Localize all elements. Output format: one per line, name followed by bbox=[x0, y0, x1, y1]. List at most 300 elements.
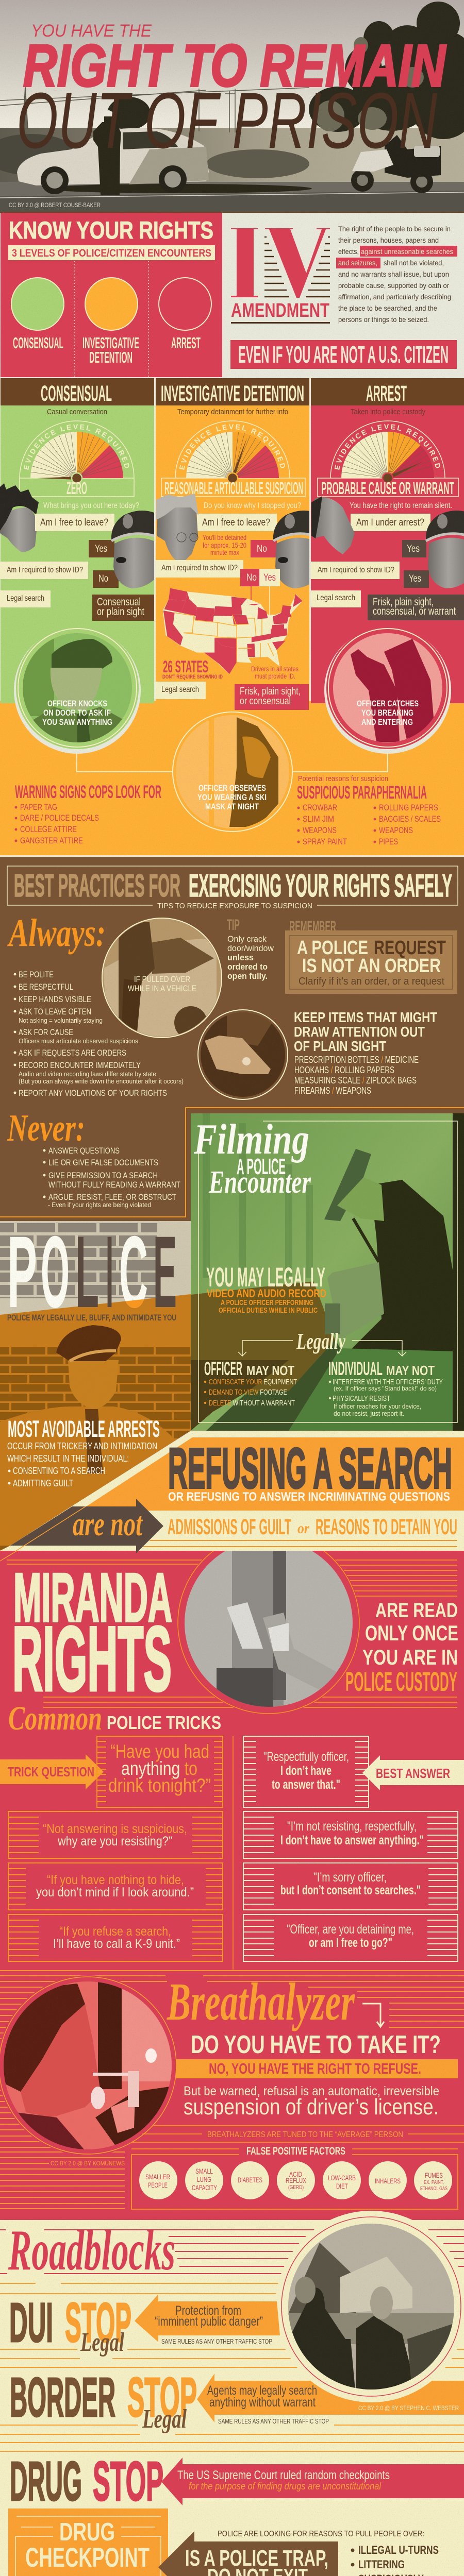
trick: K-9 unit bbox=[8, 1914, 223, 1961]
answer: yes bbox=[402, 540, 426, 557]
level: consensual bbox=[11, 278, 64, 352]
trick: K-9 unit: “If you refuse a search, bbox=[59, 1924, 171, 1939]
heading: best practices: BEST PRACTICES FOR bbox=[14, 868, 180, 904]
list: suspicious paraphernalia: WEAPONS bbox=[379, 825, 413, 835]
panel: refusing a search bbox=[0, 1431, 464, 1561]
list: always: Not asking = voluntarily staying bbox=[19, 1016, 103, 1024]
bubble: legal search bbox=[155, 682, 206, 699]
bubble: legal search: Legal search bbox=[317, 594, 355, 602]
description: Temporary detainment for further info bbox=[177, 408, 288, 416]
list: always: (But you can always write down the encounter after it occurs) bbox=[19, 1077, 184, 1085]
heading: common police tricks bbox=[8, 1700, 221, 1737]
answer: yes bbox=[89, 540, 114, 557]
are read only once bbox=[345, 1599, 458, 1697]
title bbox=[16, 21, 446, 165]
panel: never bbox=[0, 1107, 464, 1217]
face: citizen bbox=[0, 483, 39, 552]
drug stop: DRUG bbox=[10, 2450, 82, 2512]
list: reasons to pull people over: POLICE ARE LOOKING FOR REASONS TO PULL PEOPLE OVER: bbox=[218, 2530, 424, 2538]
answer: frisk: Frisk, plain sight, bbox=[240, 686, 301, 697]
arrow: are not bbox=[0, 1499, 163, 1561]
text: WARNING SIGNS COPS LOOK FOR bbox=[15, 782, 161, 802]
heading: roadblocks: Roadblocks bbox=[8, 2218, 175, 2282]
DUI stop: DUI bbox=[9, 2291, 53, 2353]
arrow: trick question: TRICK QUESTION bbox=[8, 1764, 94, 1780]
border stop: BORDER bbox=[10, 2366, 115, 2428]
detention note: You'll be detained bbox=[203, 533, 246, 541]
note: breathalyzers tuned to average: BREATHALYZERS ARE TUNED TO THE “AVERAGE” PERSON bbox=[207, 2130, 403, 2139]
list: always: ASK IF REQUESTS ARE ORDERS bbox=[19, 1048, 126, 1058]
fourth amendment text: persons or things to be seized. bbox=[338, 315, 429, 324]
level: investigative detention bbox=[82, 278, 139, 366]
tip: door/window bbox=[227, 943, 274, 953]
prompt: What brings you out here today? bbox=[43, 501, 139, 510]
note: drivers: Drivers in all states bbox=[251, 665, 299, 673]
evidence gauge: reasonable suspicion: EVIDENCE LEVEL REQUIRED bbox=[179, 424, 285, 470]
POLICE word: C bbox=[119, 1215, 148, 1329]
fourth amendment text: effects, bbox=[338, 247, 359, 256]
connector lines bbox=[77, 754, 388, 772]
panel: police may legally lie bbox=[0, 1215, 191, 1556]
answer: yes: Yes bbox=[409, 573, 421, 584]
panel: false positive factors: FALSE POSITIVE FACTORS bbox=[246, 2145, 345, 2157]
tip: open fully. bbox=[227, 971, 268, 981]
factor: acid reflux: REFLUX bbox=[286, 2176, 306, 2184]
orange backdrop of encounters area bbox=[0, 701, 464, 855]
answer: am I free to go bbox=[243, 1914, 458, 1961]
answer: am I free to go: "Officer, are you detaining me, bbox=[287, 1922, 414, 1937]
arrow: are not: are not bbox=[73, 1505, 143, 1543]
heading: miranda rights: MIRANDA bbox=[13, 1560, 172, 1636]
question and answer bbox=[176, 2031, 458, 2120]
panel: know your rights bbox=[1, 213, 222, 377]
factor: acid reflux: ACID bbox=[289, 2170, 302, 2178]
fourth amendment text: their persons, houses, papers and bbox=[338, 236, 439, 244]
list: always: ASK TO LEAVE OFTEN bbox=[19, 1007, 91, 1016]
note: breathalyzers tuned to average bbox=[131, 2126, 464, 2142]
factor: inhalers: INHALERS bbox=[375, 2177, 401, 2185]
answer: yes: Yes bbox=[95, 544, 107, 554]
scenario circle: officer catches: AND ENTERING bbox=[361, 717, 413, 727]
roadblock rule lines bbox=[0, 2230, 464, 2274]
trick: have you had anything: drink tonight?” bbox=[108, 1775, 211, 1796]
evidence gauge: zero bbox=[19, 420, 135, 498]
trick: nothing to hide bbox=[8, 1863, 223, 1910]
factor: diabetes bbox=[231, 2161, 269, 2199]
face: balding citizen bbox=[311, 496, 355, 554]
answer: no: No bbox=[98, 573, 108, 584]
stat: 26 states: DON'T REQUIRE SHOWING ID bbox=[162, 674, 223, 680]
list: keep items out of plain sight: MEASURING SCALE / ZIPLOCK BAGS bbox=[294, 1075, 417, 1086]
answer: am I free to go: or am I free to go?" bbox=[309, 1936, 392, 1950]
list: suspicious paraphernalia: SLIM JIM bbox=[303, 814, 334, 824]
face: police officer bbox=[111, 511, 154, 588]
scenario circle: officer observes: MASK AT NIGHT bbox=[205, 802, 259, 811]
IV amendment emblem: AMENDMENT bbox=[231, 300, 329, 321]
factor: fumes: EX. PAINT, bbox=[424, 2180, 444, 2185]
list: suspicious paraphernalia: CROWBAR bbox=[303, 803, 337, 812]
stat: 26 states: 26 STATES bbox=[163, 657, 208, 676]
evidence gauge: probable cause bbox=[317, 420, 459, 498]
list: officer may not: DEMAND TO VIEW FOOTAGE bbox=[209, 1388, 287, 1397]
face: older citizen bbox=[156, 494, 198, 564]
heading: A POLICE bbox=[237, 1154, 286, 1179]
list: suspicious paraphernalia: PIPES bbox=[379, 837, 398, 846]
answer: frisk bbox=[235, 684, 309, 710]
panel: miranda rights and tricks background bbox=[0, 1551, 464, 2220]
list: suspicious paraphernalia: SPRAY PAINT bbox=[303, 837, 347, 846]
scenario circle: officer catches: OFFICER CATCHES bbox=[357, 699, 419, 708]
answer: yes bbox=[404, 570, 429, 588]
road sign: drug checkpoint bbox=[8, 2509, 168, 2576]
bubble: am I under arrest: Am I under arrest? bbox=[356, 517, 424, 528]
trick: not answering is suspicious: why are you resisting?” bbox=[57, 1834, 172, 1849]
answer: no or yes by state bbox=[240, 569, 280, 586]
list: officer may not: OFFICER bbox=[204, 1358, 242, 1379]
answer: frisk or warrant: Frisk, plain sight, bbox=[373, 596, 434, 608]
list: keep items out of plain sight: HOOKAHS / ROLLING PAPERS bbox=[294, 1065, 394, 1075]
factor: fumes: ETHANOL GAS bbox=[420, 2186, 448, 2192]
heading: common police tricks: POLICE TRICKS bbox=[107, 1712, 221, 1733]
answer: frisk: or consensual bbox=[240, 696, 291, 707]
DUI stop: Legal bbox=[80, 2328, 124, 2357]
bubble: legal search: Legal search bbox=[7, 594, 44, 603]
border stop: anything without warrant bbox=[209, 2395, 316, 2410]
panel: know your rights: INVESTIGATIVE bbox=[82, 334, 139, 352]
IV amendment emblem bbox=[231, 228, 330, 324]
POLICE word: O bbox=[41, 1215, 70, 1329]
list: suspicious paraphernalia: WEAPONS bbox=[303, 825, 337, 835]
answer: respectfully officer bbox=[243, 1736, 369, 1807]
border stop: STOP bbox=[127, 2366, 197, 2428]
list: reasons to pull people over: LITTERING bbox=[358, 2558, 405, 2571]
tip: unless bbox=[227, 953, 254, 962]
scenario circle: officer catches bbox=[324, 626, 451, 754]
scenario circle: officer observes: YOU WEARING A SKI bbox=[197, 792, 267, 802]
fourth amendment text: against unreasonable searches bbox=[361, 247, 453, 256]
detention note bbox=[203, 533, 246, 556]
heading: KNOW YOUR RIGHTS bbox=[9, 216, 213, 244]
scenario circle: officer knocks bbox=[14, 626, 141, 754]
note: drivers bbox=[251, 665, 299, 680]
hero photo: officer at traffic stop bbox=[0, 0, 464, 212]
border stop: Agents may legally search bbox=[207, 2383, 317, 2398]
panel: police may legally lie: E bbox=[153, 1215, 177, 1329]
trick: have you had anything bbox=[97, 1736, 223, 1807]
bubble: legal search bbox=[311, 590, 361, 607]
bubble: am I free to leave bbox=[197, 514, 277, 531]
photo credit: CC BY 2.0 @ ROBERT COUSE-BAKER bbox=[9, 201, 101, 209]
tip: ordered to bbox=[227, 962, 268, 972]
factor: acid reflux: (GERD) bbox=[288, 2184, 304, 2191]
most avoidable arrests bbox=[7, 1416, 160, 1488]
factor: fumes bbox=[414, 2161, 452, 2199]
trick: K-9 unit: I’ll have to call a K-9 unit.” bbox=[53, 1937, 180, 1951]
factor: low-carb diet: LOW-CARB bbox=[328, 2174, 356, 2182]
list: suspicious paraphernalia: BAGGIES / SCALES bbox=[379, 814, 441, 824]
scenario circle: officer observes bbox=[173, 712, 292, 832]
most avoidable arrests: ADMITTING GUILT bbox=[13, 1478, 73, 1488]
note: drivers: must provide ID. bbox=[255, 672, 295, 680]
heading: best practices bbox=[7, 866, 458, 910]
fourth amendment text: probable cause, supported by oath or bbox=[338, 281, 449, 290]
description: Casual conversation bbox=[47, 408, 107, 416]
bubble: am I free to leave: Am I free to leave? bbox=[40, 517, 108, 528]
level: arrest bbox=[159, 278, 211, 352]
list: suspicious paraphernalia: Potential reasons for suspicion bbox=[298, 774, 388, 783]
factor: smaller people: PEOPLE bbox=[148, 2181, 168, 2189]
fourth amendment text bbox=[336, 225, 457, 324]
cuffs photo circle bbox=[177, 1531, 360, 1715]
answer: respectfully officer: to answer that." bbox=[272, 1777, 340, 1792]
photo circle: hand with pills bbox=[198, 1010, 288, 1099]
panel: roadblocks background bbox=[0, 2220, 464, 2576]
list: always: REPORT ANY VIOLATIONS OF YOUR RIGHTS bbox=[19, 1088, 167, 1098]
column: consensual: CONSENSUAL bbox=[41, 381, 112, 406]
border stop bbox=[10, 2366, 459, 2434]
list: warning signs cops look for: COLLEGE ATTIRE bbox=[20, 824, 77, 834]
drug stop: for the purpose of finding drugs are unconstitutional bbox=[189, 2481, 382, 2492]
answer: consensual or plain sight bbox=[92, 595, 154, 621]
DUI stop: SAME RULES AS ANY OTHER TRAFFIC STOP bbox=[161, 2337, 272, 2345]
trick: nothing to hide: “If you have nothing to hide, bbox=[47, 1873, 184, 1887]
scenario circle: officer knocks: YOU SAW ANYTHING bbox=[42, 717, 112, 727]
photo circle: pulled over: IF PULLED OVER bbox=[134, 974, 190, 984]
answer: not resisting bbox=[243, 1811, 458, 1858]
callout: a police request is not an order bbox=[285, 918, 457, 994]
scenario circle: officer knocks: ON DOOR TO ASK IF bbox=[43, 708, 111, 718]
column: arrest bbox=[311, 378, 464, 703]
panel: never: ANSWER QUESTIONS bbox=[48, 1146, 120, 1156]
list: always: KEEP HANDS VISIBLE bbox=[19, 994, 91, 1004]
factor: small lung capacity bbox=[185, 2161, 223, 2199]
answer: don't consent bbox=[243, 1863, 458, 1910]
border stop: Legal bbox=[142, 2404, 187, 2434]
list: warning signs cops look for: GANGSTER ATTIRE bbox=[20, 836, 83, 845]
list: always bbox=[7, 911, 184, 1098]
bubble: required to show ID: Am I required to show ID? bbox=[161, 564, 238, 572]
photo circle: pulled over: WHILE IN A VEHICLE bbox=[128, 984, 196, 993]
heading: breathalyzer: Breathalyzer bbox=[167, 1972, 355, 2031]
trick: not answering is suspicious: “Not answering is suspicious, bbox=[43, 1822, 187, 1836]
panel: never: LIE OR GIVE FALSE DOCUMENTS bbox=[48, 1158, 158, 1167]
DUI stop: Protection from bbox=[175, 2303, 241, 2318]
US stop-and-identify map bbox=[163, 588, 303, 674]
panel: never: WITHOUT FULLY READING A WARRANT bbox=[48, 1180, 180, 1190]
list: always: RECORD ENCOUNTER IMMEDIATELY bbox=[19, 1060, 141, 1070]
arrow: down bbox=[362, 2004, 384, 2027]
most avoidable arrests: CONSENTING TO A SEARCH bbox=[13, 1466, 105, 1476]
title: YOU HAVE THE bbox=[31, 21, 152, 41]
trick: nothing to hide: you don’t mind if I look around.” bbox=[36, 1885, 194, 1900]
bubble: required to show ID: Am I required to show ID? bbox=[7, 566, 83, 574]
column: investigative detention: INVESTIGATIVE DETENTION bbox=[161, 381, 304, 406]
orange officer photo bbox=[0, 1288, 191, 1556]
you may legally: A POLICE OFFICER PERFORMING bbox=[221, 1298, 313, 1307]
factor: fumes: FUMES bbox=[425, 2171, 443, 2179]
list: reasons to pull people over bbox=[218, 2530, 439, 2576]
road sign: drug checkpoint: DRUG bbox=[59, 2518, 115, 2546]
you may legally: OFFICIAL DUTIES WHILE IN PUBLIC bbox=[219, 1306, 318, 1315]
list: individual may not: PHYSICALLY RESIST bbox=[333, 1394, 390, 1403]
heading: miranda rights bbox=[0, 1531, 458, 1715]
arrow tail redrawn over red bbox=[136, 1551, 139, 1553]
face: police officer bbox=[272, 511, 309, 588]
trick: have you had anything: “Have you had bbox=[110, 1741, 209, 1762]
list: keep items out of plain sight: FIREARMS / WEAPONS bbox=[294, 1086, 371, 1096]
fourth amendment text: the place to be searched, and the bbox=[338, 304, 437, 312]
column: investigative detention bbox=[155, 378, 309, 710]
list: individual may not: do not resist, just report it. bbox=[334, 1410, 404, 1417]
heading: common police tricks: Common bbox=[8, 1700, 102, 1737]
list: keep items out of plain sight: DRAW ATTENTION OUT bbox=[294, 1024, 425, 1040]
stat: 26 states bbox=[162, 657, 223, 680]
evidence gauge: reasonable suspicion bbox=[161, 420, 306, 498]
list: always: Always: bbox=[7, 911, 106, 955]
DUI stop: “imminent public danger” bbox=[155, 2314, 263, 2329]
factor: smaller people: SMALLER bbox=[145, 2173, 170, 2181]
bubble: required to show ID bbox=[311, 562, 400, 579]
list: keep items out of plain sight: OF PLAIN SIGHT bbox=[294, 1038, 386, 1054]
list: officer may not bbox=[204, 1358, 297, 1408]
list: keep items out of plain sight: PRESCRIPTION BOTTLES / MEDICINE bbox=[294, 1055, 419, 1065]
detention note: for approx. 15-20 bbox=[203, 541, 246, 549]
factor: low-carb diet bbox=[323, 2161, 361, 2199]
bubble: legal search bbox=[0, 590, 51, 607]
heading: Filming bbox=[193, 1115, 309, 1163]
panel: know your rights: CONSENSUAL bbox=[13, 334, 63, 352]
trick: have you had anything: anything to bbox=[121, 1758, 197, 1779]
answer: not resisting: "I’m not resisting, respectfully, bbox=[287, 1819, 417, 1834]
DUI stop bbox=[9, 2291, 280, 2357]
photo circle: breathalyzer test bbox=[0, 1975, 178, 2156]
fourth amendment text: affirmation, and particularly describing bbox=[338, 293, 451, 301]
list: suspicious paraphernalia: ROLLING PAPERS bbox=[379, 803, 438, 812]
scenario circle: officer knocks: OFFICER KNOCKS bbox=[47, 699, 107, 708]
you may legally bbox=[206, 1262, 326, 1315]
bubble: required to show ID bbox=[0, 562, 88, 579]
prompt: Do you know why I stopped you? bbox=[204, 501, 301, 510]
bubble: am I under arrest bbox=[351, 514, 430, 531]
answer: frisk or warrant bbox=[368, 595, 464, 620]
factor: small lung capacity: CAPACITY bbox=[192, 2183, 217, 2192]
list: warning signs cops look for bbox=[14, 782, 161, 845]
factor: diabetes: DIABETES bbox=[238, 2176, 262, 2184]
list: warning signs cops look for: DARE / POLICE DECALS bbox=[20, 813, 99, 823]
drug stop: The US Supreme Court ruled random checkpoints bbox=[177, 2468, 390, 2482]
callout: police trap bbox=[158, 2531, 338, 2576]
bubble: required to show ID bbox=[155, 560, 243, 578]
drug stop: STOP bbox=[93, 2450, 163, 2512]
POLICE word bbox=[7, 1215, 177, 1329]
tip bbox=[227, 917, 274, 981]
POLICE word: C bbox=[119, 1215, 148, 1329]
caption: POLICE MAY LEGALLY LIE, BLUFF, AND INTIMIDATE YOU bbox=[7, 1313, 176, 1323]
list: officer may not: MAY NOT bbox=[246, 1363, 294, 1378]
answer: no or yes by state: No bbox=[246, 572, 257, 583]
list: reasons to pull people over: ILLEGAL U-TURNS bbox=[358, 2544, 439, 2556]
list: individual may not: INDIVIDUAL bbox=[328, 1358, 383, 1379]
panel: never: Never: bbox=[7, 1107, 85, 1149]
tip: TIP bbox=[227, 917, 240, 934]
list: always: BE POLITE bbox=[19, 970, 54, 979]
panel: never: GIVE PERMISSION TO A SEARCH bbox=[48, 1171, 158, 1180]
face: police officer bbox=[426, 511, 464, 588]
answer: consensual or plain sight: or plain sight bbox=[97, 606, 144, 618]
fourth amendment text: and seizures, bbox=[338, 259, 377, 267]
POLICE word: P bbox=[7, 1215, 37, 1329]
list: always: BE RESPECTFUL bbox=[19, 982, 73, 992]
panel: filming a police encounter: YOU MAY LEGALLY bbox=[206, 1262, 325, 1293]
list: individual may not: MAY NOT bbox=[386, 1363, 435, 1378]
map connector: yes bbox=[269, 586, 270, 618]
border stop: SAME RULES AS ANY OTHER TRAFFIC STOP bbox=[218, 2417, 329, 2425]
DUI stop: STOP bbox=[65, 2291, 131, 2353]
heading: Encounter bbox=[208, 1165, 311, 1200]
heading: best practices: TIPS TO REDUCE EXPOSURE TO SUSPICION bbox=[157, 902, 312, 910]
factor: small lung capacity: SMALL bbox=[195, 2167, 213, 2175]
panel: best practices background bbox=[0, 857, 464, 1221]
evidence gauge: zero: ZERO bbox=[67, 479, 87, 498]
scenario circle: officer catches: YOU BREAKING bbox=[361, 708, 413, 718]
POLICE word: L bbox=[75, 1215, 99, 1329]
level: investigative detention: DETENTION bbox=[89, 348, 132, 366]
heading: miranda rights: RIGHTS bbox=[12, 1607, 172, 1710]
arrow: trick question bbox=[0, 1754, 104, 1789]
panel: breathalyzer stripes bbox=[0, 1971, 464, 2209]
credit: CC BY 2.0 @ BY KOMUNEWS bbox=[51, 2160, 125, 2167]
panel: never: - Even if your rights are being violated bbox=[48, 1201, 151, 1209]
fourth amendment text: The right of the people to be secure in bbox=[338, 225, 451, 233]
bubble: legal search: Legal search bbox=[161, 685, 199, 694]
list: always: ASK FOR CAUSE bbox=[19, 1027, 73, 1037]
answer: don't consent: "I’m sorry officer, bbox=[313, 1870, 387, 1885]
answer: no bbox=[251, 540, 277, 557]
list: warning signs cops look for: PAPER TAG bbox=[20, 802, 57, 812]
subheading: 3 LEVELS OF POLICE/CITIZEN ENCOUNTERS bbox=[12, 247, 211, 259]
list: individual may not bbox=[328, 1358, 443, 1417]
answer: no or yes by state: Yes bbox=[263, 572, 276, 583]
list: individual may not: (ex. If officer says "Stand back!" do so) bbox=[334, 1385, 437, 1392]
callout: police trap: IS A POLICE TRAP, bbox=[185, 2546, 328, 2571]
admissions of guilt: ADMISSIONS OF GUILT bbox=[168, 1515, 291, 1539]
answer: respectfully officer: I don’t have bbox=[280, 1764, 332, 1778]
panel: never: ARGUE, RESIST, FLEE, OR OBSTRUCT bbox=[48, 1192, 176, 1202]
evidence gauge: probable cause: EVIDENCE LEVEL REQUIRED bbox=[334, 424, 440, 470]
most avoidable arrests: OCCUR FROM TRICKERY AND INTIMIDATION bbox=[7, 1441, 157, 1451]
factor: low-carb diet: DIET bbox=[336, 2182, 348, 2190]
list: officer may not: DELETE WITHOUT A WARRANT bbox=[209, 1399, 295, 1408]
tip: Only crack bbox=[227, 934, 267, 944]
fourth amendment text: shall not be violated, bbox=[384, 259, 444, 267]
list: keep items out of plain sight bbox=[294, 1009, 437, 1096]
photo circle: roadblock officers bbox=[275, 2211, 464, 2402]
fourth amendment text: and no warrants shall issue, but upon bbox=[338, 270, 449, 278]
factor: acid reflux bbox=[277, 2161, 315, 2199]
callout: a police request is not an order: A POLICE bbox=[297, 937, 368, 959]
drug stop bbox=[10, 2450, 464, 2512]
most avoidable arrests: WHICH RESULT IN THE INDIVIDUAL: bbox=[7, 1453, 129, 1464]
admissions of guilt: or bbox=[297, 1520, 309, 1537]
column: arrest: ARREST bbox=[366, 381, 407, 406]
you may legally: VIDEO AND AUDIO RECORD bbox=[207, 1287, 326, 1300]
panel: false positive factors bbox=[131, 2145, 458, 2209]
list: individual may not: If officer reaches for your device, bbox=[334, 1402, 421, 1410]
list: officer may not: CONFISCATE YOUR EQUIPMENT bbox=[209, 1378, 297, 1386]
panel: police may legally lie: MOST AVOIDABLE ARRESTS bbox=[8, 1416, 160, 1442]
photo circle: pulled over bbox=[102, 918, 222, 1039]
answer: no bbox=[93, 570, 119, 588]
